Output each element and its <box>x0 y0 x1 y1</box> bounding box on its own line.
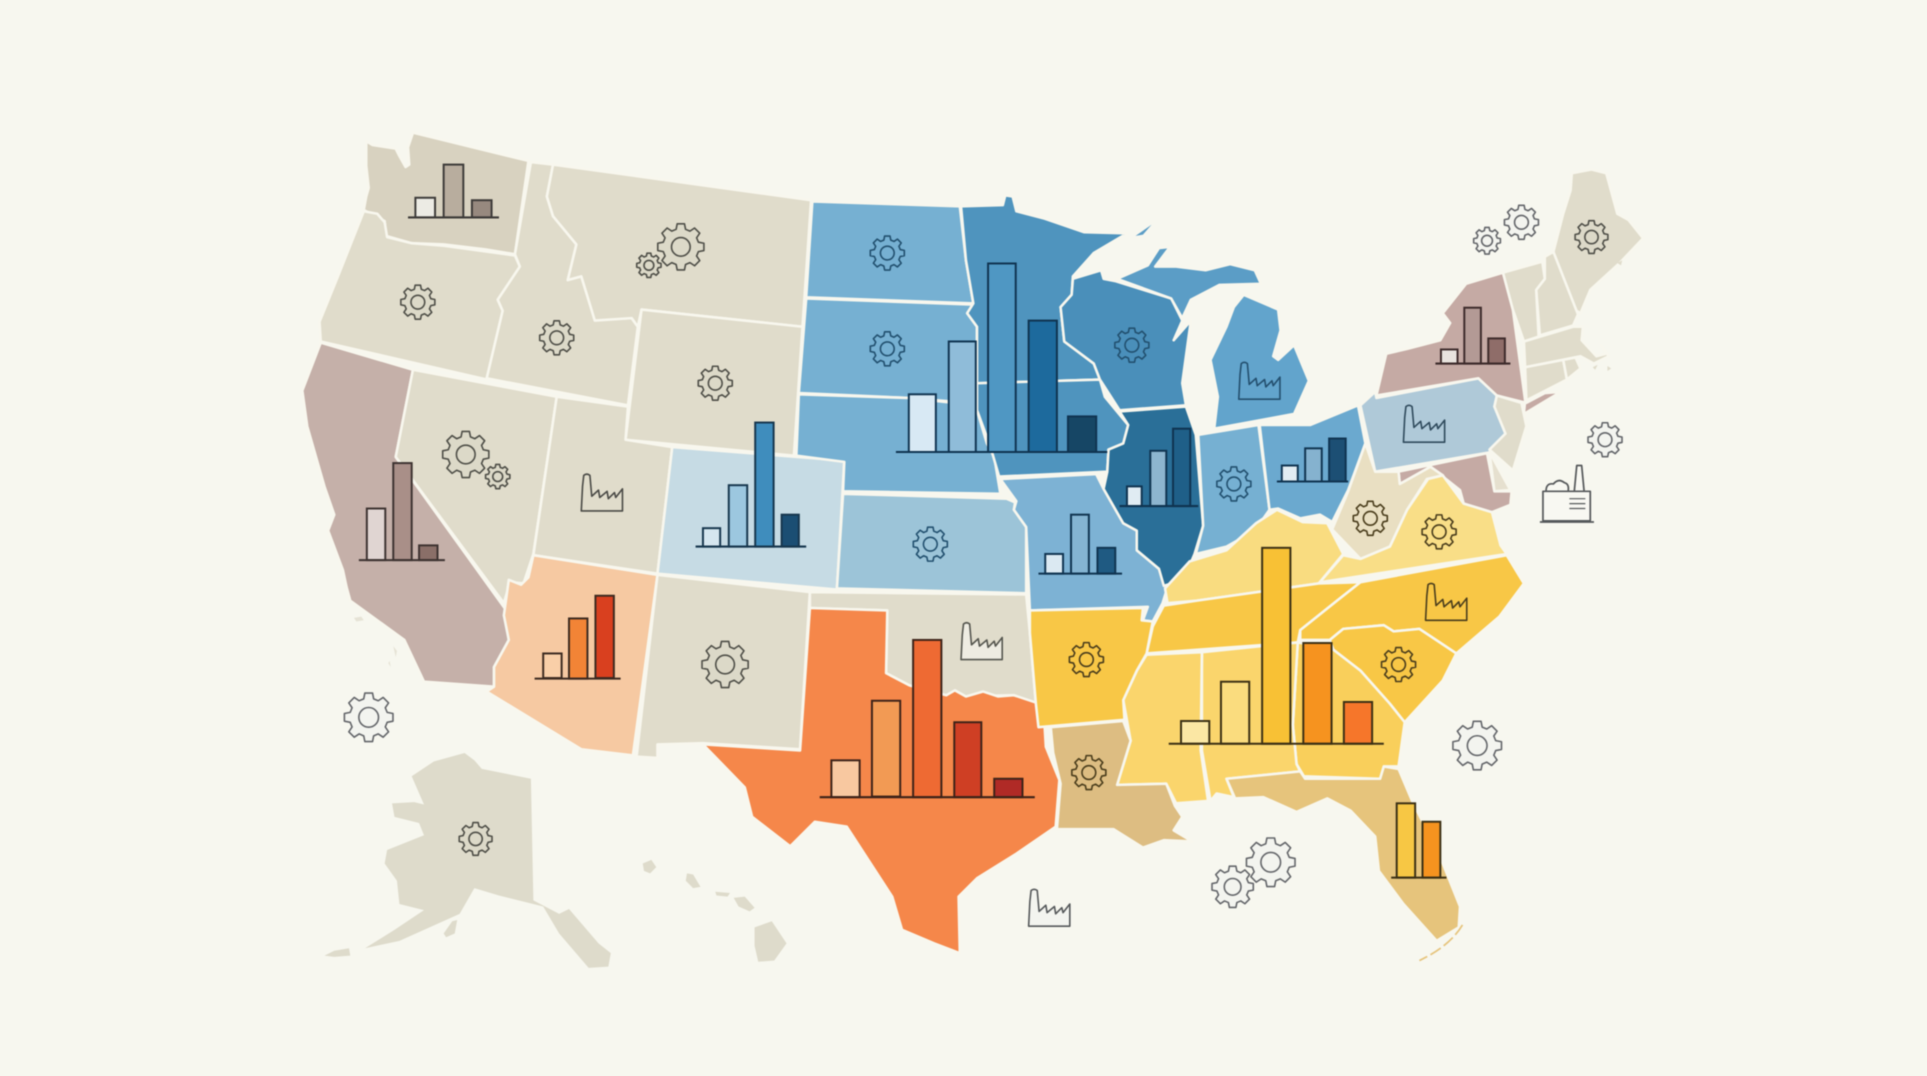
gear: Gulf large <box>1246 838 1295 887</box>
Hawaii <box>643 860 787 962</box>
state: Georgia <box>1293 642 1405 779</box>
bar chart: Washington <box>408 165 499 217</box>
gear: Gulf small <box>1212 866 1253 907</box>
state: Wisconsin <box>1061 270 1191 410</box>
gear: Atlantic south <box>1453 721 1501 770</box>
Maine and Cape Cod islets <box>1593 260 1622 371</box>
gear: Atlantic north <box>1588 423 1622 457</box>
state: Kansas <box>837 494 1026 593</box>
state: Tennessee <box>1147 582 1360 653</box>
bar chart: Illinois <box>1120 429 1198 506</box>
bar chart: Missouri <box>1038 515 1122 574</box>
state: Mississippi <box>1117 652 1208 803</box>
gear: Indiana <box>1217 467 1251 501</box>
state: Michigan lower peninsula <box>1211 295 1309 429</box>
Alaska <box>324 753 611 968</box>
gear: North Dakota <box>870 236 904 270</box>
gears on blue states <box>870 236 1251 561</box>
gear: Montana large <box>658 224 704 270</box>
gear: north small <box>1474 227 1500 254</box>
state: South Dakota <box>799 298 977 410</box>
factory: Pennsylvania <box>1403 405 1445 442</box>
state: New Jersey <box>1489 396 1526 470</box>
gears on beige states <box>401 221 1608 855</box>
state: Maryland <box>1399 453 1512 512</box>
Florida keys <box>1419 925 1462 961</box>
gear: West Virginia <box>1353 501 1387 535</box>
gear: New Mexico <box>702 641 748 688</box>
state: California <box>302 343 509 687</box>
factory: Utah <box>581 474 622 511</box>
state: New Mexico <box>637 575 810 758</box>
bar chart: Ohio <box>1277 439 1348 481</box>
state: Pennsylvania <box>1360 378 1505 472</box>
California channel islands <box>354 617 397 667</box>
state: Minnesota <box>961 195 1127 383</box>
state: Illinois <box>1104 407 1203 586</box>
state: Michigan upper peninsula <box>1117 247 1261 318</box>
state: Louisiana <box>1051 721 1192 848</box>
bar chart: Texas <box>820 640 1035 797</box>
state: Rhode Island <box>1563 357 1580 380</box>
gear: Idaho <box>540 321 574 355</box>
state: Montana <box>547 165 811 327</box>
gear: Alaska <box>459 823 492 855</box>
bar chart: Florida <box>1391 803 1446 878</box>
gear: Wisconsin <box>1115 328 1149 362</box>
state: Nebraska <box>796 394 1000 494</box>
state: Florida <box>1226 766 1460 941</box>
state: New York <box>1376 273 1561 414</box>
state: Massachusetts <box>1524 327 1609 367</box>
factory: Oklahoma <box>961 623 1002 660</box>
bar chart: California <box>359 463 445 560</box>
gear: Wyoming <box>698 366 732 400</box>
bar chart: Colorado <box>696 423 806 547</box>
Lake Superior island <box>1136 225 1152 236</box>
gear: Montana small <box>637 253 661 277</box>
state: South Carolina <box>1330 625 1456 722</box>
bar chart: Arizona <box>535 596 621 679</box>
factory: Gulf <box>1029 889 1070 926</box>
gear: Oregon <box>401 285 435 319</box>
state: Ohio <box>1260 405 1365 522</box>
state: Arkansas <box>1030 608 1153 727</box>
state: Wyoming <box>626 310 803 456</box>
state: Oklahoma <box>810 592 1036 705</box>
state: Vermont <box>1503 262 1545 341</box>
state: Kentucky <box>1165 510 1343 603</box>
gear: Arkansas <box>1069 643 1103 677</box>
state: Colorado <box>657 447 844 590</box>
bar chart: Southeast <box>1169 548 1384 744</box>
gear: Maine <box>1575 221 1608 253</box>
state: Nevada <box>396 370 557 603</box>
gear: Kansas <box>913 527 947 561</box>
state: West Virginia <box>1332 443 1443 559</box>
gear: Louisiana <box>1072 756 1106 790</box>
gear: Virginia <box>1422 515 1456 549</box>
bar chart: New York <box>1435 308 1510 364</box>
state: Texas <box>703 608 1059 953</box>
Hawaii islands <box>686 873 787 962</box>
state: North Dakota <box>806 201 973 303</box>
state: Idaho <box>487 162 638 405</box>
state: Washington <box>364 133 528 254</box>
state: Indiana <box>1196 425 1270 554</box>
state: Utah <box>533 397 672 574</box>
state: Missouri <box>1000 474 1168 622</box>
state: Virginia <box>1320 475 1507 582</box>
state: New Hampshire <box>1536 252 1578 335</box>
gear: Nevada small <box>486 464 510 489</box>
gear: north large <box>1504 205 1538 239</box>
state: Oregon <box>320 211 520 380</box>
factory: Michigan <box>1239 362 1280 399</box>
gears floating outside the map <box>344 205 1622 907</box>
state: Arizona <box>487 555 657 755</box>
large factory: Atlantic <box>1540 466 1594 522</box>
gear: Pacific <box>344 693 393 742</box>
state: Iowa <box>977 380 1128 477</box>
factory: North Carolina <box>1426 583 1467 620</box>
state: Delaware <box>1489 452 1510 491</box>
state: Alabama <box>1202 642 1300 801</box>
gear: Nevada large <box>443 431 489 478</box>
Alaska islands <box>324 920 457 957</box>
gear: South Dakota <box>870 332 904 366</box>
gear: South Carolina <box>1382 648 1416 682</box>
state: Connecticut <box>1525 360 1567 400</box>
contiguous states map <box>302 133 1643 953</box>
state: North Carolina <box>1300 555 1524 653</box>
gears on yellow states <box>1069 501 1456 790</box>
state: Maine <box>1553 170 1643 313</box>
bar chart: Midwest <box>896 263 1107 452</box>
